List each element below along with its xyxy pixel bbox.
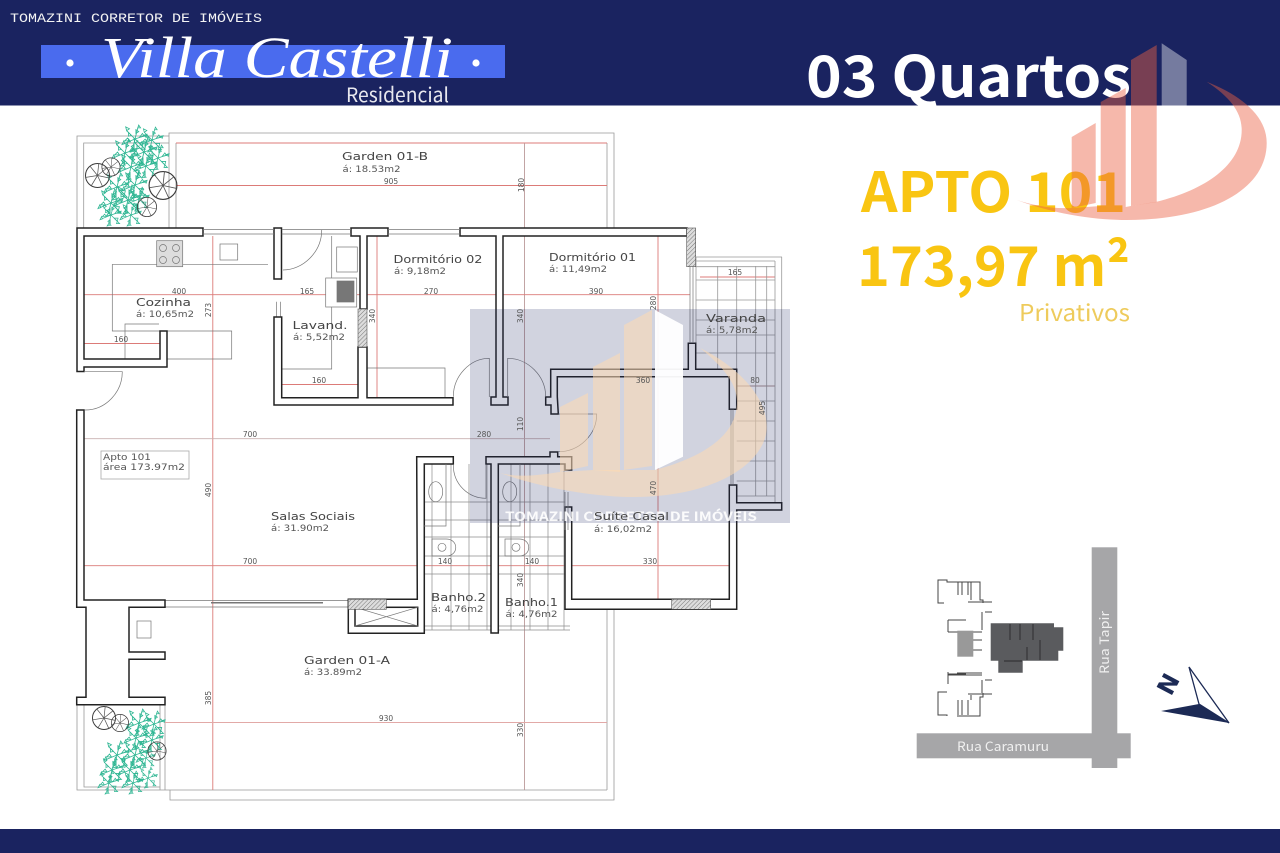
label: Cozinha <box>136 296 194 320</box>
label: Garden 01-B: á: 18.53m2 <box>342 165 400 175</box>
garden outlines <box>77 133 614 800</box>
dimension numbers <box>114 177 742 737</box>
dimension numbers: 330 <box>643 557 657 566</box>
wall: kitchen door jamb <box>274 228 282 279</box>
watermark caption: TOMAZINI CORRETOR DE IMÓVEIS <box>505 506 757 525</box>
dimension numbers over watermark: 360 <box>636 376 650 385</box>
label: Banho 2: á: 4,76m2 <box>432 605 484 615</box>
logo dots <box>66 59 480 67</box>
label: Banho 1: á: 4,76m2 <box>506 610 558 620</box>
dimension numbers: 160 <box>312 376 326 385</box>
wall: bathroom divider <box>486 452 572 633</box>
washing machine <box>326 278 357 307</box>
dimension numbers: 340 <box>368 309 377 323</box>
label: Suíte Casal: Suíte Casal <box>594 510 669 523</box>
plant: lower garden <box>98 709 165 794</box>
watermark logo top right <box>1017 43 1267 220</box>
dimension numbers: 160 <box>114 335 128 344</box>
apartment partitions <box>1004 624 1040 661</box>
dimension numbers: 400 <box>172 287 186 296</box>
floor plan <box>77 125 782 800</box>
wall: suite lower <box>565 485 782 609</box>
label: Dormitório 01 <box>549 251 636 275</box>
dimension numbers: 385 <box>204 691 213 705</box>
compass needle fill <box>1161 704 1229 723</box>
north letter: N <box>1152 669 1186 700</box>
label: Salas Sociais <box>271 510 355 534</box>
dimension numbers: 165 <box>728 268 742 277</box>
label: Dormitório 01: Dormitório 01 <box>549 251 636 264</box>
label: Banho 1: Banho.1 <box>505 596 558 609</box>
wall: bathroom 2 <box>348 457 453 633</box>
agency name: TOMAZINI CORRETOR DE IMÓVEIS <box>10 11 262 26</box>
label: Apto 101 area: área 173.97m2 <box>103 463 185 473</box>
apartment area: 173,97 m² <box>857 222 1130 302</box>
wall: kitchen <box>77 228 203 372</box>
label: Apto 101 area: Apto 101 <box>103 453 151 463</box>
road name: Rua Tapir: Rua Tapir <box>1094 610 1113 674</box>
dimension numbers: 140 <box>525 557 539 566</box>
logo subtitle: Residencial <box>346 79 449 108</box>
label: Banho 2: Banho.2 <box>431 591 486 604</box>
dimension numbers over watermark: 280 <box>477 430 491 439</box>
label: Dormitório 02: Dormitório 02 <box>394 253 482 266</box>
dimension numbers: 700 <box>243 430 257 439</box>
dimension numbers: 330 <box>516 723 525 737</box>
laundry fittings <box>276 236 445 397</box>
label: Lavanderia: Lavand. <box>292 319 348 332</box>
apartment number: APTO 101 <box>860 148 1126 228</box>
watermark centre <box>470 309 790 525</box>
label: Banho 2 <box>431 591 486 615</box>
watermark buildings <box>560 310 652 472</box>
stove <box>157 241 183 267</box>
label: Lavanderia <box>292 319 348 343</box>
dimension numbers: 270 <box>424 287 438 296</box>
wall: suite upper <box>546 343 737 414</box>
label: Suíte Casal <box>594 510 669 535</box>
wall: living room left and lower block <box>77 410 165 705</box>
dimension numbers: 930 <box>379 714 393 723</box>
label: Dormitório 02 <box>394 253 482 277</box>
dimension numbers: 700 <box>243 557 257 566</box>
dimension numbers over watermark: 110 <box>516 417 525 431</box>
label: Garden 01-B <box>342 150 428 175</box>
label: Garden 01-A: á: 33.89m2 <box>304 668 362 678</box>
dimension numbers: 280 <box>649 296 658 310</box>
label: Banho 1 <box>505 596 558 620</box>
label: Garden 01-B: Garden 01-B <box>342 150 428 163</box>
label: Dormitório 02: á: 9,18m2 <box>394 267 446 277</box>
watermark white tower <box>655 310 683 470</box>
plants <box>86 125 177 794</box>
location map <box>917 547 1131 768</box>
compass <box>1152 667 1229 723</box>
doors <box>84 230 597 498</box>
label: Salas Sociais: Salas Sociais <box>271 510 355 523</box>
label: Varanda: Varanda <box>706 312 766 325</box>
shaft and sliding door <box>93 600 348 697</box>
dimension numbers over watermark: 340 <box>516 309 525 323</box>
dimension numbers: 390 <box>589 287 603 296</box>
road: Rua Caramuru <box>917 733 1131 758</box>
label: Salas Sociais: á: 31.90m2 <box>271 524 329 534</box>
labels over watermark <box>477 309 767 535</box>
dimension lines <box>84 143 775 790</box>
building outline <box>938 580 992 716</box>
window lines <box>203 230 733 530</box>
bathroom tile grid <box>424 464 570 630</box>
wall: bedrooms <box>460 228 687 405</box>
laundry sink <box>337 247 357 272</box>
logo swoosh <box>1017 82 1267 220</box>
building core <box>957 631 973 657</box>
kitchen sink <box>220 244 238 260</box>
selected apartment <box>991 623 1063 673</box>
logo band <box>41 45 505 78</box>
dimension numbers over watermark: 495 <box>758 401 767 415</box>
dimension numbers over watermark: 80 <box>750 376 760 385</box>
logo buildings <box>1072 45 1157 208</box>
label: Varanda <box>706 312 766 336</box>
dimension numbers: 140 <box>438 557 452 566</box>
dimension numbers: 905 <box>384 177 398 186</box>
trees <box>86 158 177 760</box>
label: Garden 01-A <box>304 654 391 678</box>
dimension numbers: 180 <box>517 178 526 192</box>
wall: dormitory 02 top <box>351 228 388 309</box>
walls <box>77 228 782 705</box>
closet cross <box>355 607 418 626</box>
kitchen fittings <box>112 241 268 359</box>
road: Rua Tapir <box>1092 547 1117 768</box>
private label: Privativos <box>1019 294 1130 328</box>
service sink <box>137 621 151 638</box>
watermark swoosh <box>500 348 767 497</box>
bathroom fixtures <box>424 464 529 556</box>
room labels <box>103 150 636 678</box>
heading: bedrooms: 03 Quartos <box>806 32 1131 114</box>
varanda tile grid <box>696 257 782 503</box>
plant: upper garden <box>98 125 169 226</box>
header band <box>0 0 1280 106</box>
dimension numbers: 165 <box>300 287 314 296</box>
dimension numbers: 490 <box>204 483 213 497</box>
footer band <box>0 829 1280 853</box>
label: Apto 101 area <box>103 453 185 473</box>
logo: Villa Castelli <box>41 25 505 108</box>
label: Lavanderia: á: 5,52m2 <box>293 333 345 343</box>
label: Garden 01-A: Garden 01-A <box>304 654 391 667</box>
road name: Rua Caramuru: Rua Caramuru <box>957 736 1049 755</box>
apartment area box <box>101 451 189 479</box>
hatched wall sections <box>348 228 711 609</box>
dimension numbers: 273 <box>204 303 213 317</box>
dimension numbers: 340 <box>516 573 525 587</box>
wall: laundry <box>274 317 453 405</box>
dimension numbers over watermark: 470 <box>649 481 658 495</box>
logo pale tower <box>1162 43 1187 106</box>
label: Cozinha: á: 10,65m2 <box>136 310 194 320</box>
label: Cozinha: Cozinha <box>136 296 191 309</box>
label: Suíte Casal: á: 16,02m2 <box>594 525 652 535</box>
label: Dormitório 01: á: 11,49m2 <box>549 265 607 275</box>
label: Varanda: á: 5,78m2 <box>706 326 758 336</box>
logo script name: Villa Castelli <box>101 25 453 90</box>
watermark panel <box>470 309 790 523</box>
inner closet <box>355 607 418 626</box>
dimension numbers over watermark <box>477 309 767 495</box>
compass needle outline <box>1189 667 1229 723</box>
